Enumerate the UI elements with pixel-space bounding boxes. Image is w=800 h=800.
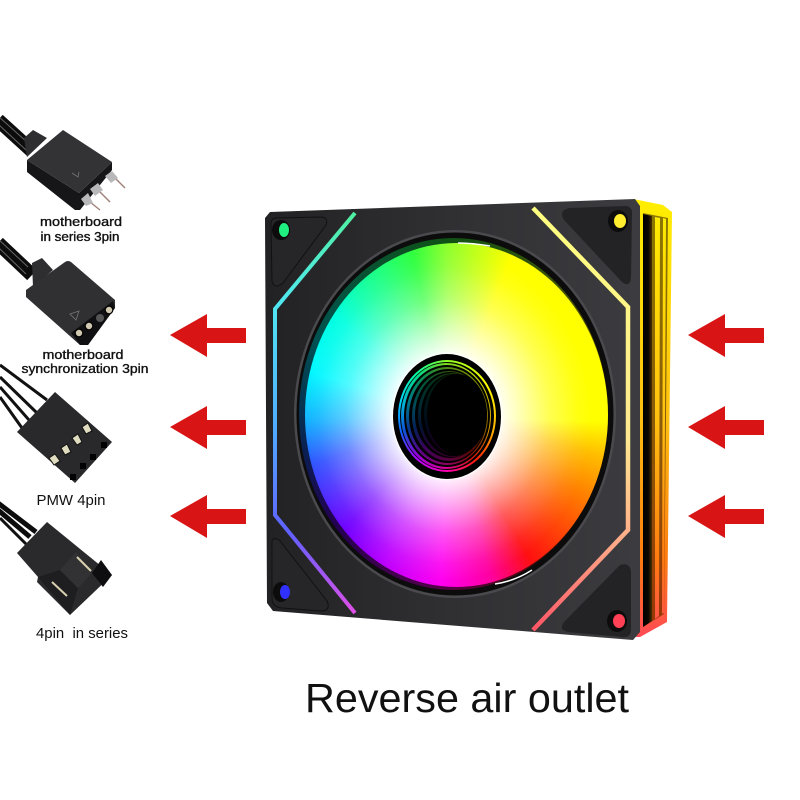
label: motherboard synchronization 3pin: synchronization 3pin bbox=[22, 362, 149, 376]
fan frame bbox=[265, 199, 640, 640]
blade highlights bbox=[458, 243, 532, 584]
label: motherboard in series 3pin bbox=[40, 215, 122, 244]
fan opening bbox=[294, 230, 616, 598]
label: PMW 4pin: PMW 4pin bbox=[36, 493, 106, 509]
title: Reverse air outlet: Reverse air outlet bbox=[305, 675, 630, 721]
arrow: left middle bbox=[170, 406, 246, 449]
arrow: left top bbox=[170, 314, 246, 357]
label: 4pin in series: 4pin in series bbox=[36, 626, 128, 642]
corner pad: bottom right bbox=[562, 564, 631, 637]
fan side panel bbox=[633, 199, 672, 637]
label: motherboard in series 3pin: motherboard bbox=[40, 215, 122, 229]
corner pad: bottom left bbox=[272, 538, 328, 611]
corner pad: top right bbox=[562, 206, 632, 284]
arrow: right middle bbox=[688, 406, 764, 449]
arrow: right bottom bbox=[688, 495, 764, 538]
LED strip: left bbox=[275, 213, 355, 613]
connector: motherboard synchronization 3pin bbox=[0, 239, 115, 345]
corner pad: top left bbox=[271, 217, 327, 286]
label: motherboard synchronization 3pin bbox=[22, 348, 149, 376]
arrow: right top bbox=[688, 314, 764, 357]
blade shadow bbox=[299, 238, 608, 590]
label: motherboard in series 3pin: in series 3pin bbox=[40, 230, 120, 244]
connector: PMW 4pin bbox=[0, 365, 112, 483]
rainbow fan wheel bbox=[305, 243, 608, 587]
connector: motherboard in series 3pin bbox=[0, 116, 125, 210]
label: motherboard synchronization 3pin: motherboard bbox=[42, 348, 124, 362]
infinity mirror hub bbox=[393, 354, 501, 479]
arrow: left bottom bbox=[170, 495, 246, 538]
connector: 4pin in series bbox=[0, 503, 112, 615]
LED strip: right bbox=[533, 208, 628, 630]
